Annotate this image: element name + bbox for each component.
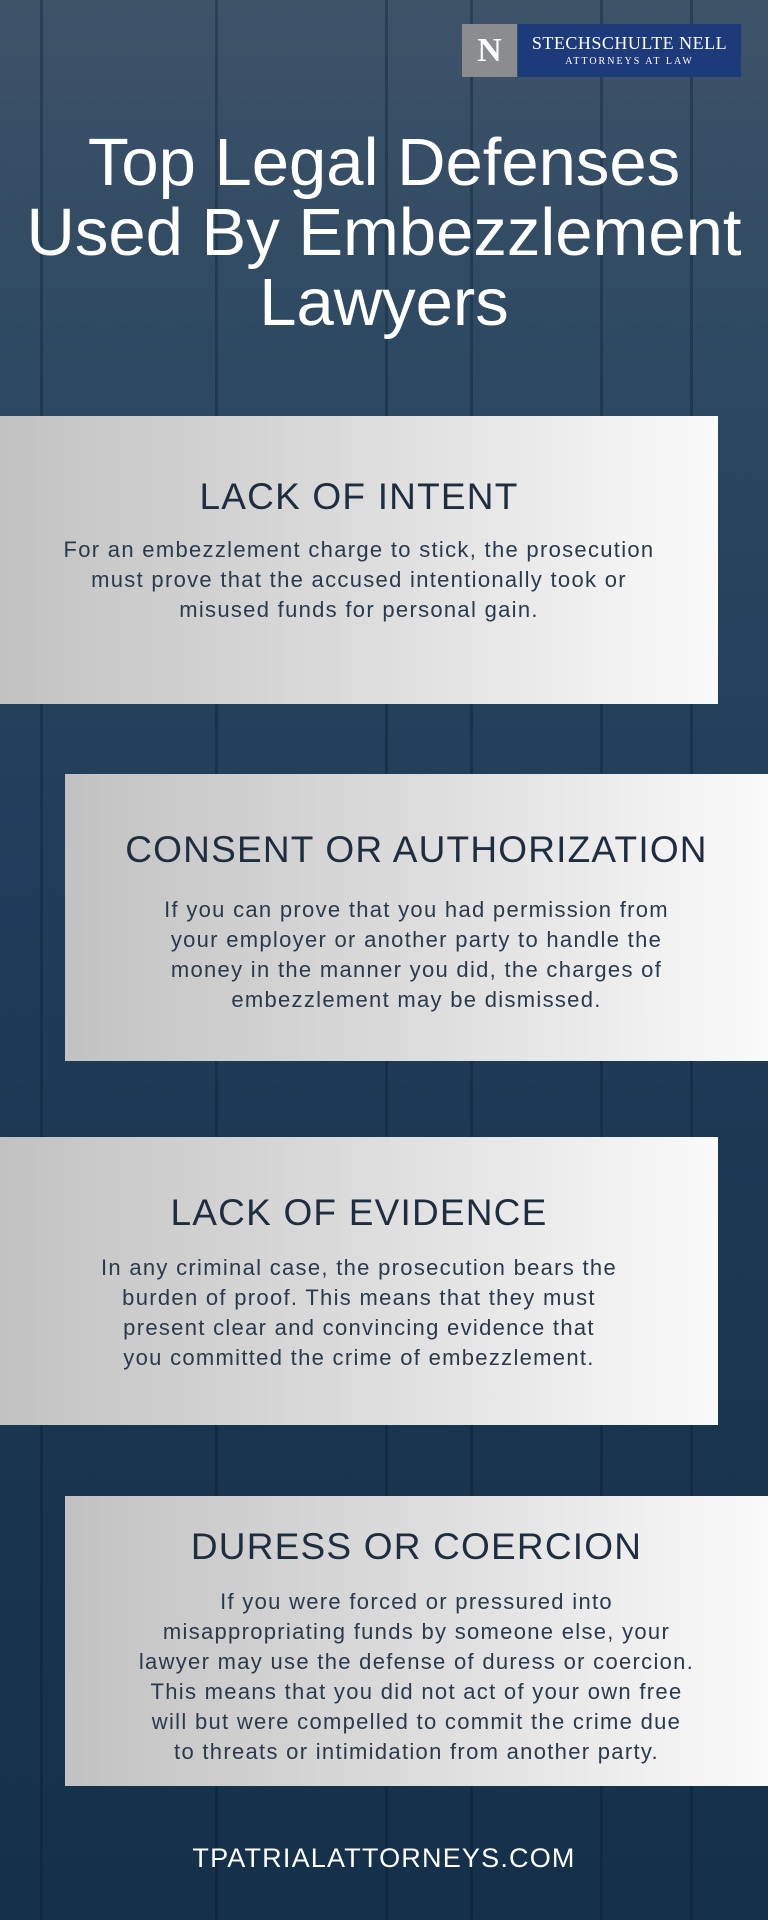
body text: you committed the crime of embezzlement. <box>123 1345 595 1370</box>
logo text: ATTORNEYS AT LAW <box>565 56 694 67</box>
body text: burden of proof. This means that they must <box>122 1285 596 1310</box>
panel: duress or coercion <box>65 1496 768 1786</box>
body text: If you can prove that you had permission from <box>164 897 669 922</box>
logo <box>462 24 741 77</box>
heading: LACK OF INTENT <box>200 476 518 517</box>
body text: misused funds for personal gain. <box>179 597 539 622</box>
title: Lawyers <box>259 265 509 340</box>
panel: lack of intent <box>0 416 718 704</box>
body text: If you were forced or pressured into <box>220 1589 613 1614</box>
heading: LACK OF EVIDENCE <box>171 1192 547 1233</box>
body text: For an embezzlement charge to stick, the prosecution <box>64 537 654 562</box>
logo text <box>518 24 741 77</box>
body text: misappropriating funds by someone else, your <box>163 1619 670 1644</box>
body text: This means that you did not act of your own free <box>150 1679 682 1704</box>
title: Used By Embezzlement <box>27 195 741 270</box>
icon: monogram: N <box>477 32 502 69</box>
body text <box>164 897 669 1012</box>
logo text: STECHSCHULTE NELL <box>532 33 727 53</box>
body text: money in the manner you did, the charges of <box>171 957 662 982</box>
body text <box>64 537 654 622</box>
panel: lack of evidence <box>0 1137 718 1425</box>
body text: must prove that the accused intentionally took or <box>91 567 627 592</box>
heading: CONSENT OR AUTHORIZATION <box>125 829 708 870</box>
body text: your employer or another party to handle the <box>171 927 662 952</box>
body text: to threats or intimidation from another party. <box>174 1739 659 1764</box>
heading: DURESS OR COERCION <box>191 1526 642 1567</box>
body text: In any criminal case, the prosecution bears the <box>101 1255 617 1280</box>
title: Top Legal Defenses <box>88 125 680 200</box>
title <box>27 125 741 340</box>
body text: lawyer may use the defense of duress or coercion. <box>139 1649 694 1674</box>
body text <box>139 1589 694 1764</box>
icon: monogram <box>462 24 517 77</box>
body text: present clear and convincing evidence that <box>123 1315 595 1340</box>
footer url: TPATRIALATTORNEYS.COM <box>192 1843 576 1873</box>
panel: consent or authorization <box>65 774 768 1061</box>
body text: embezzlement may be dismissed. <box>231 987 602 1012</box>
body text: will but were compelled to commit the crime due <box>152 1709 681 1734</box>
body text <box>101 1255 617 1370</box>
